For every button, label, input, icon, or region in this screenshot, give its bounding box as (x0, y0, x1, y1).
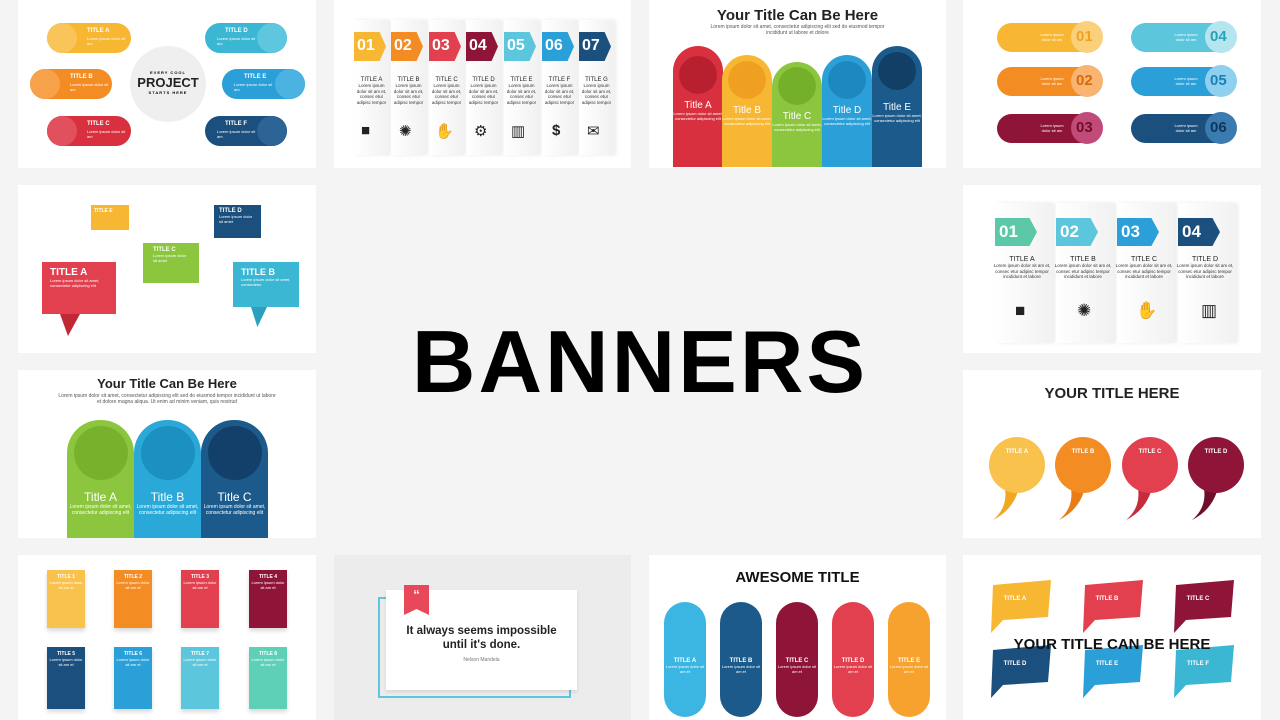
ribbons: TITLE D (1004, 661, 1027, 667)
ribbons: TITLE B (1096, 596, 1119, 602)
title: BANNERS: BANNERS (412, 312, 868, 411)
pill 03: Lorem ipsum dolor sit am (1040, 123, 1064, 133)
row 1 cards: TITLE 2 (124, 574, 142, 580)
icons row: ■ (361, 122, 370, 139)
teal outline (378, 597, 571, 698)
column B: Title B (151, 490, 184, 504)
titles and text: Lorem ipsum dolor sit am et, consec etur adipisc tempor incididunt et labore (1116, 263, 1172, 279)
pill C (776, 602, 818, 717)
row 1 cards: TITLE 4 (259, 574, 277, 580)
pill 03 (997, 114, 1101, 143)
pill E: TITLE E (898, 658, 920, 664)
panel: project pills (18, 0, 316, 168)
column C: Lorem ipsum dolor sit amet, consectetur adipiscing elit (772, 122, 822, 132)
column A (67, 420, 134, 538)
icons row: ✺ (399, 123, 412, 140)
tags 01-04: 02 (1060, 222, 1079, 241)
callout A: TITLE A (50, 267, 87, 278)
pill 06: 06 (1210, 119, 1227, 136)
pill C: TITLE C (87, 121, 110, 127)
pill A (47, 23, 131, 53)
callout A: Lorem ipsum dolor sit amet, consectetur adipiscing elit (50, 278, 99, 288)
pill A: Lorem ipsum dolor sit am (87, 36, 125, 46)
row 2 cards (46, 647, 288, 714)
pill E: Lorem ipsum dolor sit am et (890, 664, 928, 674)
column C: Title C (783, 111, 811, 122)
pill E: TITLE E (244, 74, 266, 80)
title: Your Title Can Be Here (97, 376, 237, 391)
comma bubbles: TITLE A (1006, 449, 1029, 455)
icons: ✺ (1077, 301, 1091, 320)
row 2 cards: Lorem ipsum dolor sit am et (251, 657, 285, 667)
titles and text: TITLE A (1009, 256, 1035, 263)
callout B: Lorem ipsum dolor sit amet, consectetur (241, 277, 290, 287)
titles and text: TITLE D (1192, 256, 1218, 263)
numbered arrow tags: 07 (582, 37, 600, 54)
callout C: TITLE C (153, 247, 176, 253)
quote card: It always seems impossible (406, 625, 557, 637)
column titles and text: TITLE D (472, 77, 495, 83)
center circle PROJECT: PROJECT (137, 75, 199, 90)
ribbons: TITLE E (1096, 661, 1118, 667)
pill 06 (1131, 114, 1235, 143)
pill 03: 03 (1076, 119, 1093, 136)
pill A: TITLE A (87, 28, 109, 34)
pill 04: Lorem ipsum dolor sit am (1174, 32, 1198, 42)
numbered arrow tags: 03 (432, 37, 450, 54)
icons: ▥ (1201, 301, 1217, 320)
icon: red bookmark: “ (413, 587, 420, 602)
ribbons: TITLE F (1187, 661, 1209, 667)
row 1 cards: Lorem ipsum dolor sit am et (183, 580, 217, 590)
column titles and text: Lorem ipsum dolor sit am et, consec etur adipisc tempor (469, 83, 498, 104)
quote card: Nelson Mandela (463, 657, 500, 663)
pill 02 (997, 67, 1101, 96)
column C (201, 420, 268, 538)
title: AWESOME TITLE (735, 569, 860, 586)
row 1 cards: TITLE 1 (57, 574, 75, 580)
callout E: TITLE E (94, 208, 113, 214)
center circle PROJECT: STARTS HERE (149, 90, 187, 95)
pill 02: 02 (1076, 72, 1093, 89)
column titles and text: Lorem ipsum dolor sit am et, consec etur adipisc tempor (357, 83, 386, 104)
callout D (214, 205, 261, 238)
numbered arrow tags: 01 (357, 37, 375, 54)
callout C: Lorem ipsum dolor sit amet (153, 253, 186, 263)
center circle PROJECT: EVERY COOL (150, 70, 186, 75)
tags 01-04: 04 (1182, 222, 1201, 241)
subtitle: Lorem ipsum dolor sit amet, consectetur adipiscing elit sed do eiusmod tempor incididunt ut labore et dolore magna aliqua. Ut enim ad minim veniam, quis nostrud (58, 393, 276, 405)
icons row: ▥ (511, 123, 525, 140)
column B: Lorem ipsum dolor sit amet, consectetur adipiscing elit (137, 504, 198, 516)
column A: Title A (84, 490, 117, 504)
row 1 cards: Lorem ipsum dolor sit am et (49, 580, 83, 590)
titles and text: Lorem ipsum dolor sit am et, consec etur adipisc tempor incididunt et labore (994, 263, 1050, 279)
titles and text: TITLE C (1131, 256, 1157, 263)
panel: folded ribbons (963, 555, 1261, 720)
row 1 cards: Lorem ipsum dolor sit am et (116, 580, 150, 590)
column D: Lorem ipsum dolor sit amet, consectetur adipiscing elit (822, 116, 872, 126)
column titles and text: Lorem ipsum dolor sit am et, consec etur adipisc tempor (507, 83, 536, 104)
pill 05: Lorem ipsum dolor sit am (1174, 76, 1198, 86)
column backgrounds (1001, 202, 1238, 344)
quote card: until it's done. (443, 639, 520, 651)
panel: 8 title cards (18, 555, 316, 720)
subtitle: Lorem ipsum dolor sit amet, consectetur adipiscing elit sed do eiusmod tempor incididunt ut labore et dolore (710, 24, 884, 36)
callout B (233, 262, 299, 307)
tags 01-04: 01 (999, 222, 1018, 241)
icons row: ✉ (587, 123, 600, 140)
column C: Lorem ipsum dolor sit amet, consectetur adipiscing elit (204, 504, 265, 516)
callout A (42, 262, 116, 314)
pill B (30, 69, 112, 99)
column B (134, 420, 201, 538)
pill D (205, 23, 287, 53)
callout D: Lorem ipsum dolor sit amet (219, 214, 252, 224)
column titles and text: TITLE G (585, 77, 608, 83)
column titles and text: Lorem ipsum dolor sit am et, consec etur adipisc tempor (545, 83, 574, 104)
pill 04 (1131, 23, 1235, 52)
icon: red bookmark (404, 585, 429, 615)
pill B: Lorem ipsum dolor sit am (70, 82, 108, 92)
pill F (205, 116, 287, 146)
pill C: Lorem ipsum dolor sit am et (778, 664, 816, 674)
column titles and text: Lorem ipsum dolor sit am et, consec etur adipisc tempor (394, 83, 423, 104)
ribbons (991, 580, 1234, 698)
pill B: Lorem ipsum dolor sit am et (722, 664, 760, 674)
icons: ✋ (1136, 301, 1157, 320)
icons row: ⚙ (474, 123, 487, 140)
pill C (47, 116, 131, 146)
icons: ■ (1015, 301, 1025, 320)
pill A (664, 602, 706, 717)
column titles and text (356, 76, 612, 105)
ribbons: TITLE A (1004, 596, 1027, 602)
column backgrounds (360, 20, 616, 156)
column C: Title C (217, 490, 252, 504)
column A: Lorem ipsum dolor sit amet, consectetur adipiscing elit (70, 504, 131, 516)
panel: three arched columns (18, 370, 316, 538)
pill 04: 04 (1210, 28, 1227, 45)
icons row: ✋ (435, 123, 454, 140)
callout C (143, 243, 199, 283)
panel: 7 numbered columns (334, 0, 631, 168)
comma bubbles: TITLE D (1205, 449, 1228, 455)
pill 06: Lorem ipsum dolor sit am (1174, 123, 1198, 133)
icons (1015, 301, 1217, 320)
pill E (888, 602, 930, 717)
column B: Title B (733, 105, 761, 116)
pill A: Lorem ipsum dolor sit am et (666, 664, 704, 674)
row 2 cards: TITLE 8 (259, 651, 277, 657)
ribbons: TITLE C (1187, 596, 1210, 602)
pill D: TITLE D (225, 28, 248, 34)
column A (673, 46, 723, 167)
row 1 cards: TITLE 3 (191, 574, 209, 580)
column B (722, 55, 772, 167)
pill E (222, 69, 305, 99)
pill 01 (997, 23, 1101, 52)
callout A tail (60, 314, 80, 336)
tags 01-04 (995, 218, 1220, 246)
row 2 cards: TITLE 7 (191, 651, 209, 657)
center circle PROJECT (130, 46, 206, 122)
column E: Title E (883, 102, 911, 113)
row 2 cards: TITLE 6 (124, 651, 142, 657)
icons row: $ (552, 122, 560, 139)
panel: 4 numbered columns (963, 185, 1261, 353)
pill F: Lorem ipsum dolor sit am (217, 129, 255, 139)
numbered arrow tags: 06 (545, 37, 563, 54)
pill E: Lorem ipsum dolor sit am (234, 82, 272, 92)
title: YOUR TITLE HERE (1044, 385, 1180, 402)
row 1 cards: Lorem ipsum dolor sit am et (251, 580, 285, 590)
row 2 cards: Lorem ipsum dolor sit am et (116, 657, 150, 667)
column titles and text: TITLE A (361, 77, 382, 83)
titles and text: Lorem ipsum dolor sit am et, consec etur adipisc tempor incididunt et labore (1177, 263, 1233, 279)
row 2 cards: Lorem ipsum dolor sit am et (183, 657, 217, 667)
titles and text: TITLE B (1070, 256, 1096, 263)
comma bubbles: TITLE B (1072, 449, 1095, 455)
titles and text: Lorem ipsum dolor sit am et, consec etur adipisc tempor incididunt et labore (1055, 263, 1111, 279)
panel: comma bubbles (963, 370, 1261, 538)
pill 05 (1131, 67, 1235, 96)
callout B tail (251, 307, 267, 327)
column E (872, 46, 922, 167)
pill F: TITLE F (225, 121, 247, 127)
numbered arrow tags: 05 (507, 37, 525, 54)
pill D: Lorem ipsum dolor sit am et (834, 664, 872, 674)
numbered arrow tags (354, 32, 611, 61)
callout E (91, 205, 129, 230)
tags 01-04: 03 (1121, 222, 1140, 241)
column titles and text: TITLE B (397, 77, 420, 83)
column D: Title D (833, 105, 861, 116)
title: YOUR TITLE CAN BE HERE (1014, 636, 1210, 653)
column A: Title A (684, 100, 712, 111)
column titles and text: Lorem ipsum dolor sit am et, consec etur adipisc tempor (582, 83, 611, 104)
titles and text (994, 256, 1233, 279)
column D (822, 55, 872, 167)
panel: numbered pills 01-06 (963, 0, 1261, 168)
panel: five arched columns (649, 0, 946, 168)
pill 02: Lorem ipsum dolor sit am (1040, 76, 1064, 86)
row 2 cards: TITLE 5 (57, 651, 75, 657)
pill D (832, 602, 874, 717)
pill 01: 01 (1076, 28, 1093, 45)
column B: Lorem ipsum dolor sit amet, consectetur adipiscing elit (722, 116, 772, 126)
column titles and text: TITLE F (549, 77, 570, 83)
comma bubbles: TITLE C (1139, 449, 1162, 455)
callout D: TITLE D (219, 208, 242, 214)
column E: Lorem ipsum dolor sit amet, consectetur adipiscing elit (872, 113, 922, 123)
column titles and text: Lorem ipsum dolor sit am et, consec etur adipisc tempor (432, 83, 461, 104)
pill B: TITLE B (730, 658, 752, 664)
panel: quote (378, 585, 580, 698)
pill 01: Lorem ipsum dolor sit am (1040, 32, 1064, 42)
panel: awesome pills (649, 555, 946, 720)
callout B: TITLE B (241, 267, 275, 277)
row 2 cards: Lorem ipsum dolor sit am et (49, 657, 83, 667)
pill C: TITLE C (786, 658, 808, 664)
pill D: TITLE D (842, 658, 864, 664)
column A: Lorem ipsum dolor sit amet, consectetur adipiscing elit (673, 111, 723, 121)
pill A: TITLE A (674, 658, 696, 664)
pill 05: 05 (1210, 72, 1227, 89)
comma bubbles (989, 437, 1244, 520)
pill C: Lorem ipsum dolor sit am (87, 129, 125, 139)
column titles and text: TITLE C (435, 77, 458, 83)
column C (772, 62, 822, 167)
panel: speech callouts (18, 185, 316, 353)
numbered arrow tags: 04 (469, 37, 487, 54)
quote card (386, 590, 577, 690)
column titles and text: TITLE E (510, 77, 532, 83)
numbered arrow tags: 02 (394, 37, 412, 54)
pill D: Lorem ipsum dolor sit am (217, 36, 255, 46)
icons row (361, 122, 600, 140)
pill B (720, 602, 762, 717)
title: Your Title Can Be Here (717, 7, 878, 24)
pill B: TITLE B (70, 74, 93, 80)
row 1 cards (46, 570, 288, 632)
